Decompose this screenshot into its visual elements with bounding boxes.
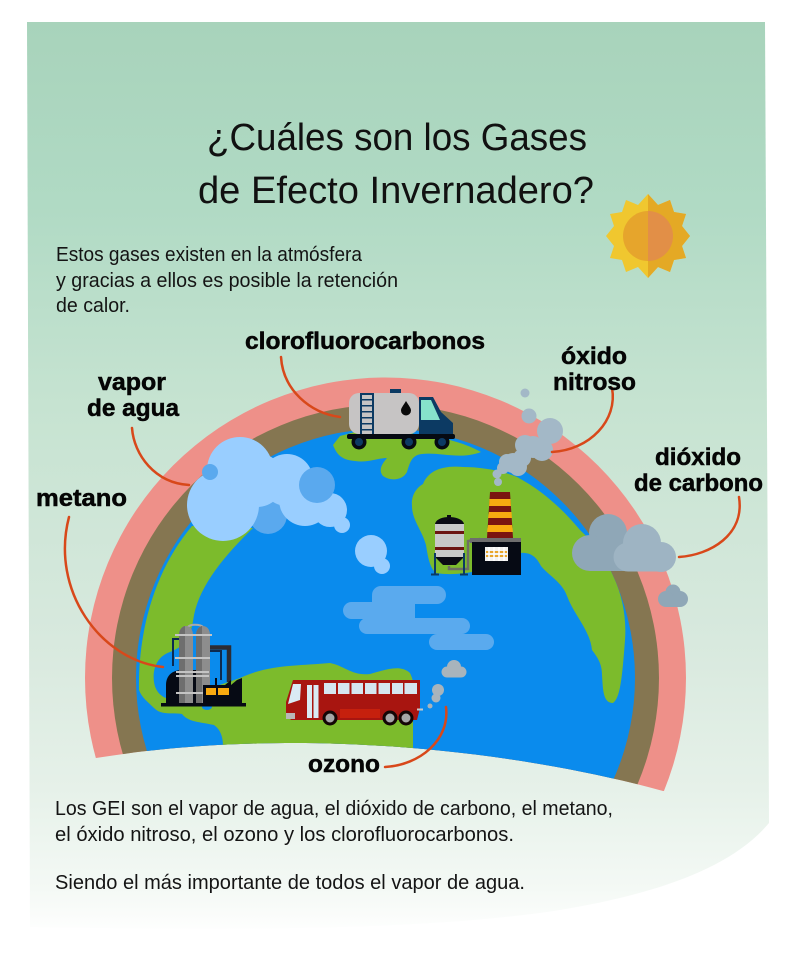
storage tank [431,515,468,574]
icon: tanker truck [347,389,455,450]
factory window [485,547,508,561]
ocean [136,430,635,779]
atmosphere: pink layer [85,378,686,791]
label: óxido nitroso: nitroso [553,369,636,396]
columns [179,626,210,703]
label: ozono: ozono [308,751,380,778]
clouds: carbon dioxide [572,514,688,607]
label: dióxido de carbono: dióxido [655,444,741,471]
icon: sun [606,194,690,278]
continents [139,428,625,760]
icon: red bus [286,680,423,726]
label: vapor de agua: vapor [98,369,166,396]
atmosphere: brown layer [112,407,659,784]
callout lines [65,357,740,767]
label: dióxido de carbono [634,444,763,497]
exhaust smoke [428,660,466,708]
intro text: y gracias a ellos es posible la retención [56,270,398,292]
intro text [56,244,398,317]
title: de Efecto Invernadero? [198,170,594,212]
ladder [360,393,374,434]
closing text: el óxido nitroso, el ozono y los clorofluorocarbonos. [55,824,514,846]
label: clorofluorocarbonos: clorofluorocarbonos [245,328,485,355]
closing text: Los GEI son el vapor de agua, el dióxido de carbono, el metano, [55,798,613,820]
closing text [55,798,613,894]
cloud: water vapor [187,437,350,541]
streak clouds [343,586,494,650]
title: ¿Cuáles son los Gases [207,117,587,159]
icon: refinery [161,625,246,706]
label: dióxido de carbono: de carbono [634,470,763,497]
smoke: nitrous oxide [492,388,563,486]
closing text: Siendo el más importante de todos el vapor de agua. [55,872,525,894]
label: óxido nitroso: óxido [561,343,627,370]
chimney [487,492,513,538]
earth globe with atmosphere layers [85,378,686,791]
small cloud [355,535,390,574]
intro text: Estos gases existen en la atmósfera [56,244,363,266]
door [307,685,318,718]
label: metano: metano [36,485,127,512]
intro text: de calor. [56,295,130,317]
label: vapor de agua: de agua [87,395,180,422]
icon: factory with storage tank [431,492,521,575]
bus windows [324,683,417,694]
label: óxido nitroso [553,343,636,396]
label: vapor de agua [87,369,180,422]
title [198,117,594,212]
